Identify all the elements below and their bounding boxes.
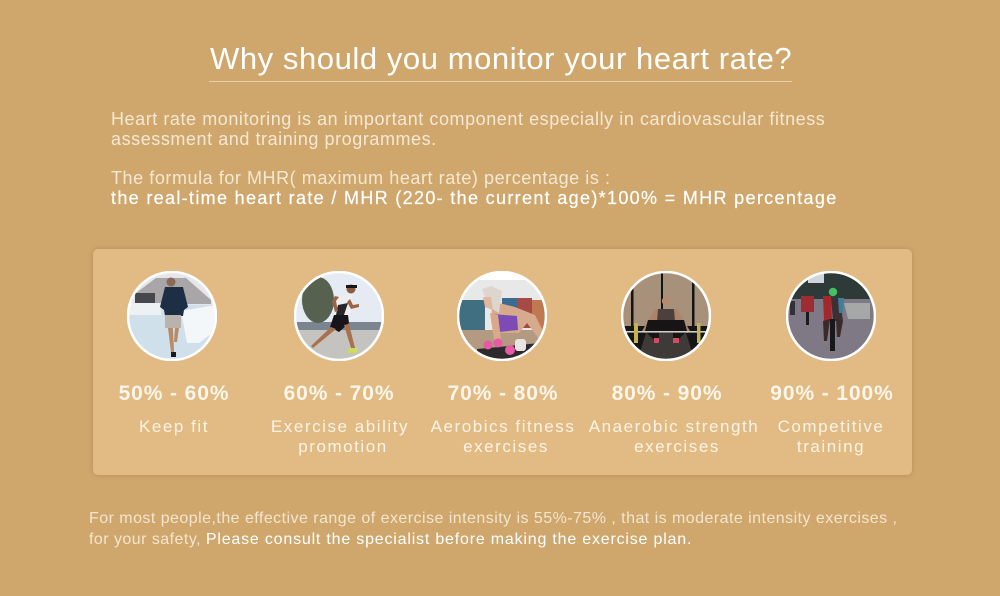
label: keep fit: Keep fit (139, 417, 209, 436)
label: competitive: training (797, 437, 865, 456)
percent: 70-80: 70% - 80% (448, 382, 558, 405)
percent: 80-90: 80% - 90% (612, 382, 722, 405)
icon: woman with dumbbells (457, 271, 547, 361)
formula text (111, 168, 838, 208)
label: exercise ability: Exercise ability (271, 417, 409, 436)
icon: cyclists (786, 271, 876, 361)
intro text (111, 109, 825, 149)
footer note: For most people,the effective range of exercise intensity is 55%-75% , that is moderate intensity exercises , (89, 510, 897, 527)
intro text: assessment and training programmes. (111, 129, 437, 149)
label: aerobics: exercises (463, 437, 549, 456)
panel: intensity zones (93, 249, 912, 475)
percent: 90-100: 90% - 100% (770, 382, 894, 405)
percent: 60-70: 60% - 70% (284, 382, 394, 405)
icon: man jogging (127, 271, 217, 361)
label: competitive: Competitive (778, 417, 884, 436)
intro text: Heart rate monitoring is an important component especially in cardiovascular fitness (111, 109, 825, 129)
footer note (89, 510, 897, 548)
title: Why should you monitor your heart rate? (210, 41, 792, 76)
label: anaerobic: Anaerobic strength (589, 417, 759, 436)
icon: runner (294, 271, 384, 361)
label: anaerobic: exercises (634, 437, 720, 456)
icon: weightlifter (621, 271, 711, 361)
label: exercise ability: promotion (298, 437, 388, 456)
formula text: The formula for MHR( maximum heart rate) percentage is : (111, 168, 611, 188)
percent: 50-60: 50% - 60% (119, 382, 229, 405)
label: exercise ability (271, 417, 409, 456)
label: aerobics: Aerobics fitness (431, 417, 575, 436)
formula text: the real-time heart rate / MHR (220- the current age)*100% = MHR percentage (111, 188, 838, 208)
label: anaerobic (588, 417, 759, 456)
footer note: for your safety, Please consult the specialist before making the exercise plan. (89, 531, 692, 548)
label: competitive (778, 417, 884, 456)
label: aerobics (430, 417, 575, 456)
